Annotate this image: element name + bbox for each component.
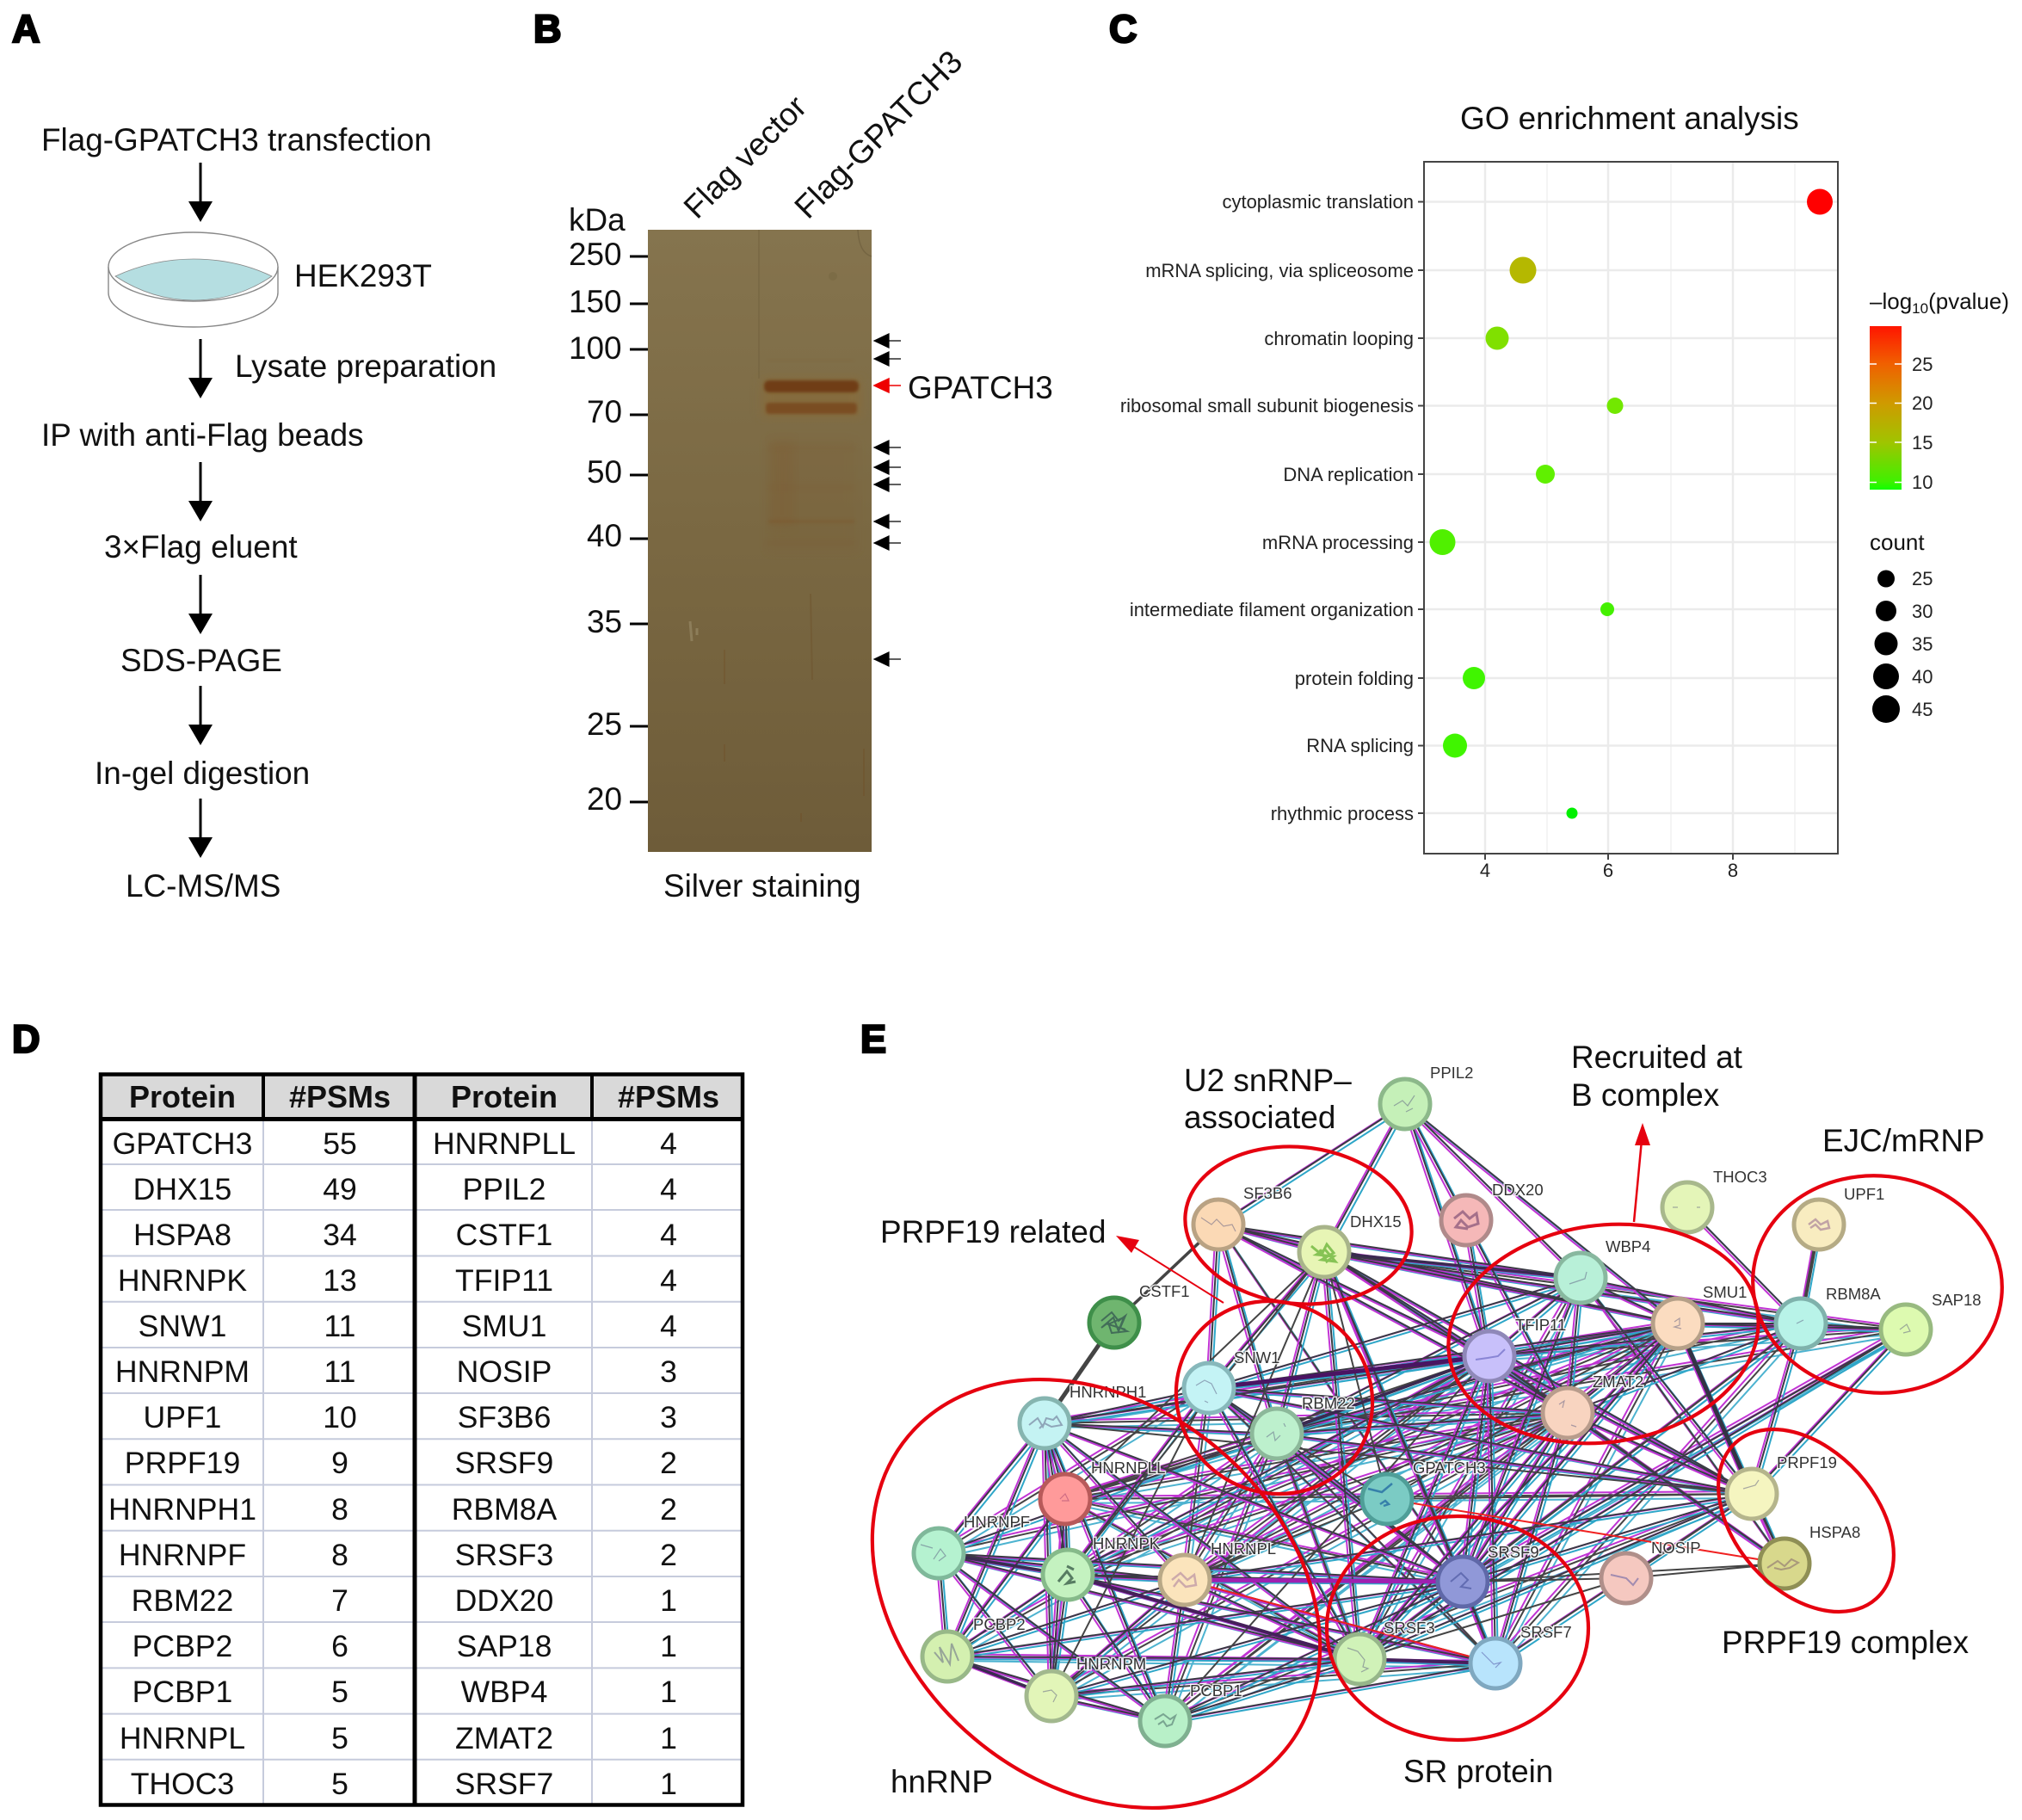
- network edges: [936, 1104, 1909, 1725]
- row 14: 1: [660, 1721, 677, 1755]
- node: CSTF1: [1089, 1298, 1139, 1348]
- panel E: protein interaction network: [786, 1017, 2013, 1820]
- cluster outline: PRPF19 complex: [1683, 1395, 1929, 1646]
- network nodes: [914, 1079, 1931, 1746]
- plot frame and ticks: [1418, 162, 1838, 860]
- y axis labels: mRNA processing: [1262, 532, 1414, 553]
- node labels: SRSF3: [1384, 1619, 1435, 1637]
- legend: p value colour bar: 10: [1912, 300, 1928, 317]
- y axis labels: protein folding: [1295, 668, 1414, 689]
- row 14: [120, 1721, 677, 1755]
- node: SRSF9: [1438, 1557, 1488, 1607]
- row 3: 4: [660, 1218, 677, 1252]
- row 15: 5: [331, 1767, 348, 1801]
- node: HNRNPF: [914, 1528, 964, 1578]
- step: IP: IP with anti-Flag beads: [41, 417, 364, 453]
- row 9: 2: [660, 1492, 677, 1527]
- arrow: step 5: [188, 686, 213, 745]
- node labels: NOSIP: [1651, 1539, 1701, 1557]
- band arrows: [874, 334, 901, 666]
- row 10: [119, 1538, 677, 1572]
- node: DHX15: [1299, 1227, 1349, 1277]
- legend: p value colour bar: –log: [1870, 288, 1912, 314]
- row 12: [133, 1629, 677, 1663]
- row 2: 49: [323, 1172, 357, 1206]
- row 5: SMU1: [462, 1309, 546, 1343]
- label: EJC/mRNP: EJC/mRNP: [1822, 1123, 1985, 1158]
- row 1: HNRNPLL: [433, 1126, 576, 1161]
- legend: count size scale: 35: [1912, 633, 1933, 655]
- node labels: PCBP1: [1190, 1681, 1242, 1700]
- node: PCBP2: [922, 1632, 972, 1681]
- row 8: 2: [660, 1446, 677, 1480]
- row 2: [133, 1172, 677, 1206]
- node: GPATCH3: [1362, 1474, 1412, 1524]
- label: PRPF19 complex: PRPF19 complex: [1722, 1625, 1970, 1660]
- dots: [1430, 189, 1833, 819]
- node labels: HNRNPLL: [1091, 1459, 1165, 1477]
- marker labels and ticks: 70: [587, 394, 622, 429]
- node labels: SNW1: [1234, 1348, 1279, 1367]
- legend: p value colour bar: 25: [1912, 354, 1933, 375]
- label: U2 snRNP-associated: associated: [1184, 1100, 1335, 1135]
- red arrow: GPATCH3 band: [874, 379, 901, 392]
- marker labels and ticks: 35: [587, 604, 622, 639]
- node labels: ZMAT2: [1593, 1373, 1643, 1391]
- row 10: SRSF3: [455, 1538, 553, 1572]
- row 3: 34: [323, 1218, 357, 1252]
- node labels: SF3B6: [1243, 1184, 1292, 1202]
- node: SRSF7: [1470, 1638, 1520, 1688]
- row 6: HNRNPM: [115, 1354, 250, 1389]
- node: UPF1: [1794, 1200, 1844, 1249]
- row 8: PRPF19: [125, 1446, 240, 1480]
- y axis labels: DNA replication: [1283, 464, 1414, 485]
- row 8: [125, 1446, 677, 1480]
- plot grid: [1424, 162, 1838, 854]
- row 5: [139, 1309, 677, 1343]
- marker labels and ticks: 25: [587, 706, 622, 742]
- node: HNRNPK: [1043, 1550, 1093, 1600]
- marker labels and ticks: 20: [587, 781, 622, 817]
- row 2: PPIL2: [463, 1172, 546, 1206]
- arrow: step 1: [188, 163, 213, 222]
- row 3: [133, 1218, 677, 1252]
- row 4: 13: [323, 1263, 357, 1298]
- row 13: 1: [660, 1675, 677, 1709]
- node labels: HNRNPF: [964, 1513, 1030, 1531]
- panel letter D: D: [12, 1017, 40, 1061]
- row 2: DHX15: [133, 1172, 231, 1206]
- arrow: recruited at B complex: [1634, 1123, 1650, 1222]
- row 10: 8: [331, 1538, 348, 1572]
- row 13: PCBP1: [133, 1675, 232, 1709]
- row 14: ZMAT2: [455, 1721, 553, 1755]
- arrow: step 4: [188, 575, 213, 634]
- node labels: SRSF7: [1520, 1623, 1572, 1641]
- node: HNRNPL: [1160, 1555, 1210, 1605]
- table header: Protein: [451, 1079, 558, 1114]
- row 7: SF3B6: [458, 1400, 551, 1434]
- node: SAP18: [1881, 1305, 1931, 1354]
- legend: p value colour bar: 20: [1912, 392, 1933, 414]
- row 15: [131, 1767, 677, 1801]
- node labels: RBM8A: [1826, 1285, 1881, 1303]
- label: GPATCH3: GPATCH3: [908, 370, 1053, 405]
- node: PPIL2: [1380, 1079, 1430, 1129]
- chart title: GO enrichment analysis: [1460, 101, 1799, 136]
- node labels: HNRNPH1: [1070, 1383, 1146, 1401]
- row 12: SAP18: [457, 1629, 552, 1663]
- row 5: 4: [660, 1309, 677, 1343]
- row 9: 8: [331, 1492, 348, 1527]
- node labels: PRPF19: [1777, 1453, 1837, 1471]
- legend: count size scale: 25: [1912, 568, 1933, 589]
- node labels: CSTF1: [1139, 1282, 1190, 1300]
- cluster outline: hnRNP: [786, 1291, 1406, 1820]
- step: digestion: In-gel digestion: [95, 756, 310, 791]
- row 6: NOSIP: [457, 1354, 552, 1389]
- row 15: THOC3: [131, 1767, 234, 1801]
- cluster outline: U2 snRNP: [1177, 1136, 1420, 1315]
- row 3: CSTF1: [456, 1218, 552, 1252]
- table header: #PSMs: [289, 1079, 391, 1114]
- legend: p value colour bar: 15: [1912, 432, 1933, 453]
- row 11: 7: [331, 1583, 348, 1618]
- arrow: step 2: [188, 339, 213, 398]
- row 9: RBM8A: [452, 1492, 558, 1527]
- node: HNRNPH1: [1020, 1398, 1070, 1448]
- y axis labels: [1120, 191, 1414, 824]
- step: SDS-PAGE: SDS-PAGE: [120, 643, 282, 678]
- row 12: 1: [660, 1629, 677, 1663]
- node labels: TFIP11: [1515, 1316, 1566, 1334]
- y axis labels: mRNA splicing, via spliceosome: [1145, 260, 1414, 281]
- row 9: [108, 1492, 677, 1527]
- row 7: UPF1: [144, 1400, 221, 1434]
- node: ZMAT2: [1543, 1388, 1593, 1438]
- panel letter A: A: [12, 7, 40, 51]
- node labels: HSPA8: [1809, 1523, 1860, 1541]
- node labels: PPIL2: [1430, 1064, 1473, 1082]
- label: U2 snRNP-associated: U2 snRNP–: [1184, 1063, 1352, 1098]
- legend: count size scale: 45: [1912, 699, 1933, 720]
- row 11: [132, 1583, 677, 1618]
- row 6: 3: [660, 1354, 677, 1389]
- node: SF3B6: [1193, 1200, 1243, 1249]
- step: transfection: Flag-GPATCH3 transfection: [41, 122, 432, 157]
- node: SMU1: [1653, 1299, 1703, 1348]
- arrow: step 6: [188, 799, 213, 858]
- panel letter E: E: [860, 1017, 886, 1061]
- row 1: GPATCH3: [113, 1126, 252, 1161]
- label: lysate preparation: Lysate preparation: [235, 349, 496, 384]
- caption: silver staining: Silver staining: [663, 868, 861, 904]
- node labels: PCBP2: [973, 1615, 1026, 1633]
- table header: Protein: [129, 1079, 236, 1114]
- marker labels and ticks: 250: [569, 237, 622, 272]
- legend: count size scale: [1870, 529, 1933, 723]
- row 6: 11: [324, 1354, 355, 1389]
- row 4: HNRNPK: [118, 1263, 247, 1298]
- label: recruited at B complex: Recruited at: [1571, 1040, 1742, 1075]
- legend: p value colour bar: (pvalue): [1928, 288, 2009, 314]
- cluster outline: SR protein: [1327, 1516, 1588, 1740]
- marker labels and ticks: kDa: [569, 202, 626, 238]
- node: HSPA8: [1760, 1539, 1809, 1589]
- node labels: DHX15: [1350, 1212, 1402, 1231]
- row 10: 2: [660, 1538, 677, 1572]
- step: eluent: 3×Flag eluent: [104, 529, 298, 565]
- node: RBM22: [1252, 1409, 1302, 1459]
- marker labels and ticks: 100: [569, 330, 622, 366]
- node labels: SAP18: [1932, 1291, 1982, 1309]
- node labels: DDX20: [1492, 1181, 1544, 1199]
- row 9: HNRNPH1: [108, 1492, 256, 1527]
- y axis labels: intermediate filament organization: [1130, 599, 1414, 620]
- step: LC-MS/MS: LC-MS/MS: [126, 868, 280, 904]
- legend: count size scale: count: [1870, 529, 1925, 555]
- row 13: WBP4: [461, 1675, 547, 1709]
- legend: p value colour bar: 10: [1912, 472, 1933, 493]
- row 10: HNRNPF: [119, 1538, 246, 1572]
- label: U2 snRNP-associated: [1184, 1063, 1352, 1135]
- row 15: 1: [660, 1767, 677, 1801]
- marker labels and ticks: 40: [587, 518, 622, 553]
- row 7: [144, 1400, 677, 1434]
- node: THOC3: [1662, 1182, 1712, 1232]
- row 5: 11: [324, 1309, 355, 1343]
- lane label: Flag vector: Flag vector: [677, 89, 813, 225]
- node: PCBP1: [1140, 1696, 1190, 1746]
- node labels: HNRNPL: [1211, 1539, 1276, 1558]
- y axis labels: rhythmic process: [1271, 803, 1414, 824]
- node: SRSF3: [1335, 1634, 1384, 1684]
- lane label: Flag-GPATCH3: Flag-GPATCH3: [787, 43, 969, 225]
- row 1: 55: [323, 1126, 357, 1161]
- legend: p value colour bar: [1870, 288, 2009, 493]
- label: HEK293T: HEK293T: [294, 258, 432, 293]
- row 4: 4: [660, 1263, 677, 1298]
- node: SNW1: [1184, 1363, 1234, 1413]
- legend: count size scale: 30: [1912, 601, 1933, 622]
- row 5: SNW1: [139, 1309, 226, 1343]
- row 12: PCBP2: [133, 1629, 232, 1663]
- label: hnRNP: hnRNP: [891, 1764, 993, 1799]
- panel A: workflow: [12, 7, 496, 904]
- row 1: [113, 1126, 677, 1161]
- row 7: 3: [660, 1400, 677, 1434]
- row 4: TFIP11: [455, 1263, 553, 1298]
- x axis labels: 8: [1728, 860, 1738, 881]
- marker labels and ticks: 150: [569, 284, 622, 319]
- arrow: step 3: [188, 462, 213, 521]
- node: PRPF19: [1727, 1469, 1777, 1519]
- x axis labels: [1480, 860, 1738, 881]
- row 11: RBM22: [132, 1583, 233, 1618]
- row 8: 9: [331, 1446, 348, 1480]
- label: PRPF19 related: PRPF19 related: [880, 1214, 1106, 1249]
- row 14: HNRNPL: [120, 1721, 245, 1755]
- table grid: [101, 1074, 743, 1805]
- node labels: WBP4: [1606, 1237, 1650, 1255]
- row 13: 5: [331, 1675, 348, 1709]
- node labels: UPF1: [1844, 1185, 1884, 1203]
- row 11: 1: [660, 1583, 677, 1618]
- row 13: [133, 1675, 677, 1709]
- node labels: GPATCH3: [1413, 1459, 1486, 1477]
- cluster outline: PRPF19 related: [1138, 1262, 1410, 1533]
- gel image: [648, 230, 872, 852]
- row 6: [115, 1354, 677, 1389]
- label: recruited at B complex: [1571, 1040, 1742, 1113]
- panel B: silver stain gel: [533, 7, 1053, 904]
- label: SR protein: SR protein: [1403, 1754, 1553, 1789]
- row 11: DDX20: [455, 1583, 553, 1618]
- node: RBM8A: [1776, 1299, 1826, 1348]
- y axis labels: chromatin looping: [1264, 328, 1414, 349]
- table header: #PSMs: [618, 1079, 719, 1114]
- node labels: HNRNPK: [1093, 1534, 1161, 1552]
- y axis labels: cytoplasmic translation: [1222, 191, 1414, 213]
- node: DDX20: [1441, 1195, 1491, 1245]
- panel C: GO enrichment dot plot: [1109, 7, 2009, 881]
- row 2: 4: [660, 1172, 677, 1206]
- arrow: PRPF19 related: [1116, 1236, 1224, 1303]
- node labels: THOC3: [1713, 1168, 1767, 1186]
- row 12: 6: [331, 1629, 348, 1663]
- marker labels and ticks: [569, 202, 648, 817]
- cluster outline: EJC/mRNP: [1742, 1163, 2013, 1405]
- legend: count size scale: 40: [1912, 666, 1933, 688]
- row 15: SRSF7: [455, 1767, 553, 1801]
- x axis labels: 4: [1480, 860, 1490, 881]
- row 4: [118, 1263, 677, 1298]
- panel D: PSM table: [12, 1017, 743, 1805]
- label: recruited at B complex: B complex: [1571, 1077, 1720, 1113]
- row 7: 10: [323, 1400, 357, 1434]
- cluster outline: recruited at B complex: [1434, 1205, 1772, 1463]
- row 1: 4: [660, 1126, 677, 1161]
- node labels: [964, 1064, 1982, 1700]
- panel letter C: C: [1109, 7, 1137, 51]
- row 14: 5: [331, 1721, 348, 1755]
- node labels: SRSF9: [1488, 1543, 1539, 1561]
- node labels: SMU1: [1703, 1283, 1747, 1301]
- node: TFIP11: [1464, 1331, 1514, 1381]
- node labels: RBM22: [1302, 1394, 1355, 1412]
- y axis labels: ribosomal small subunit biogenesis: [1120, 395, 1414, 416]
- node: HNRNPLL: [1040, 1474, 1090, 1524]
- node: NOSIP: [1601, 1553, 1651, 1603]
- node labels: HNRNPM: [1076, 1655, 1146, 1673]
- icon: culture dish: [108, 232, 278, 327]
- x axis labels: 6: [1603, 860, 1613, 881]
- node: WBP4: [1556, 1253, 1606, 1303]
- row 8: SRSF9: [455, 1446, 553, 1480]
- y axis labels: RNA splicing: [1306, 735, 1414, 756]
- table header: [101, 1075, 743, 1118]
- panel letter B: B: [533, 7, 561, 51]
- row 3: HSPA8: [133, 1218, 231, 1252]
- marker labels and ticks: 50: [587, 454, 622, 490]
- node: HNRNPM: [1026, 1671, 1076, 1721]
